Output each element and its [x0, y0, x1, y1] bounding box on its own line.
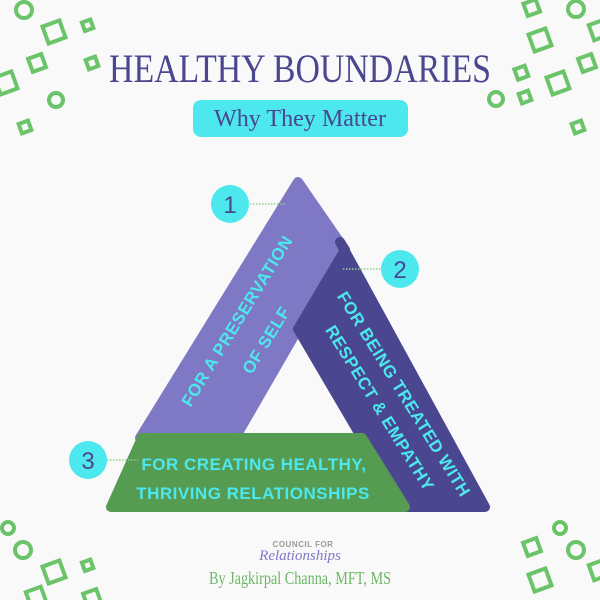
subtitle badge: Why They Matter — [214, 106, 386, 132]
marker 3 — [69, 441, 138, 479]
label 3 — [136, 455, 370, 503]
label 1: FOR A PRESERVATION — [178, 232, 297, 410]
subtitle badge — [193, 100, 408, 137]
logo — [258, 540, 341, 564]
marker 2 — [343, 250, 419, 288]
marker 3: 3 — [81, 448, 95, 475]
marker 1: 1 — [223, 192, 237, 219]
title: HEALTHY BOUNDARIES — [109, 46, 491, 91]
segment: dark respect — [298, 242, 485, 507]
marker 2: 2 — [393, 257, 407, 284]
logo: COUNCIL FOR — [273, 540, 333, 549]
segment: purple preservation of self — [140, 182, 345, 438]
label 1: OF SELF — [239, 303, 294, 377]
segment: green relationships — [111, 438, 405, 507]
marker 1 — [211, 185, 286, 223]
label 2: FOR BEING TREATED WITH — [333, 288, 474, 500]
author: By Jagkirpal Channa, MFT, MS — [209, 568, 391, 588]
logo: Relationships — [258, 548, 341, 564]
label 3: FOR CREATING HEALTHY, — [141, 455, 367, 474]
label 3: THRIVING RELATIONSHIPS — [136, 484, 370, 503]
triangle diagram — [111, 182, 485, 507]
label 2: RESPECT & EMPATHY — [321, 322, 438, 495]
